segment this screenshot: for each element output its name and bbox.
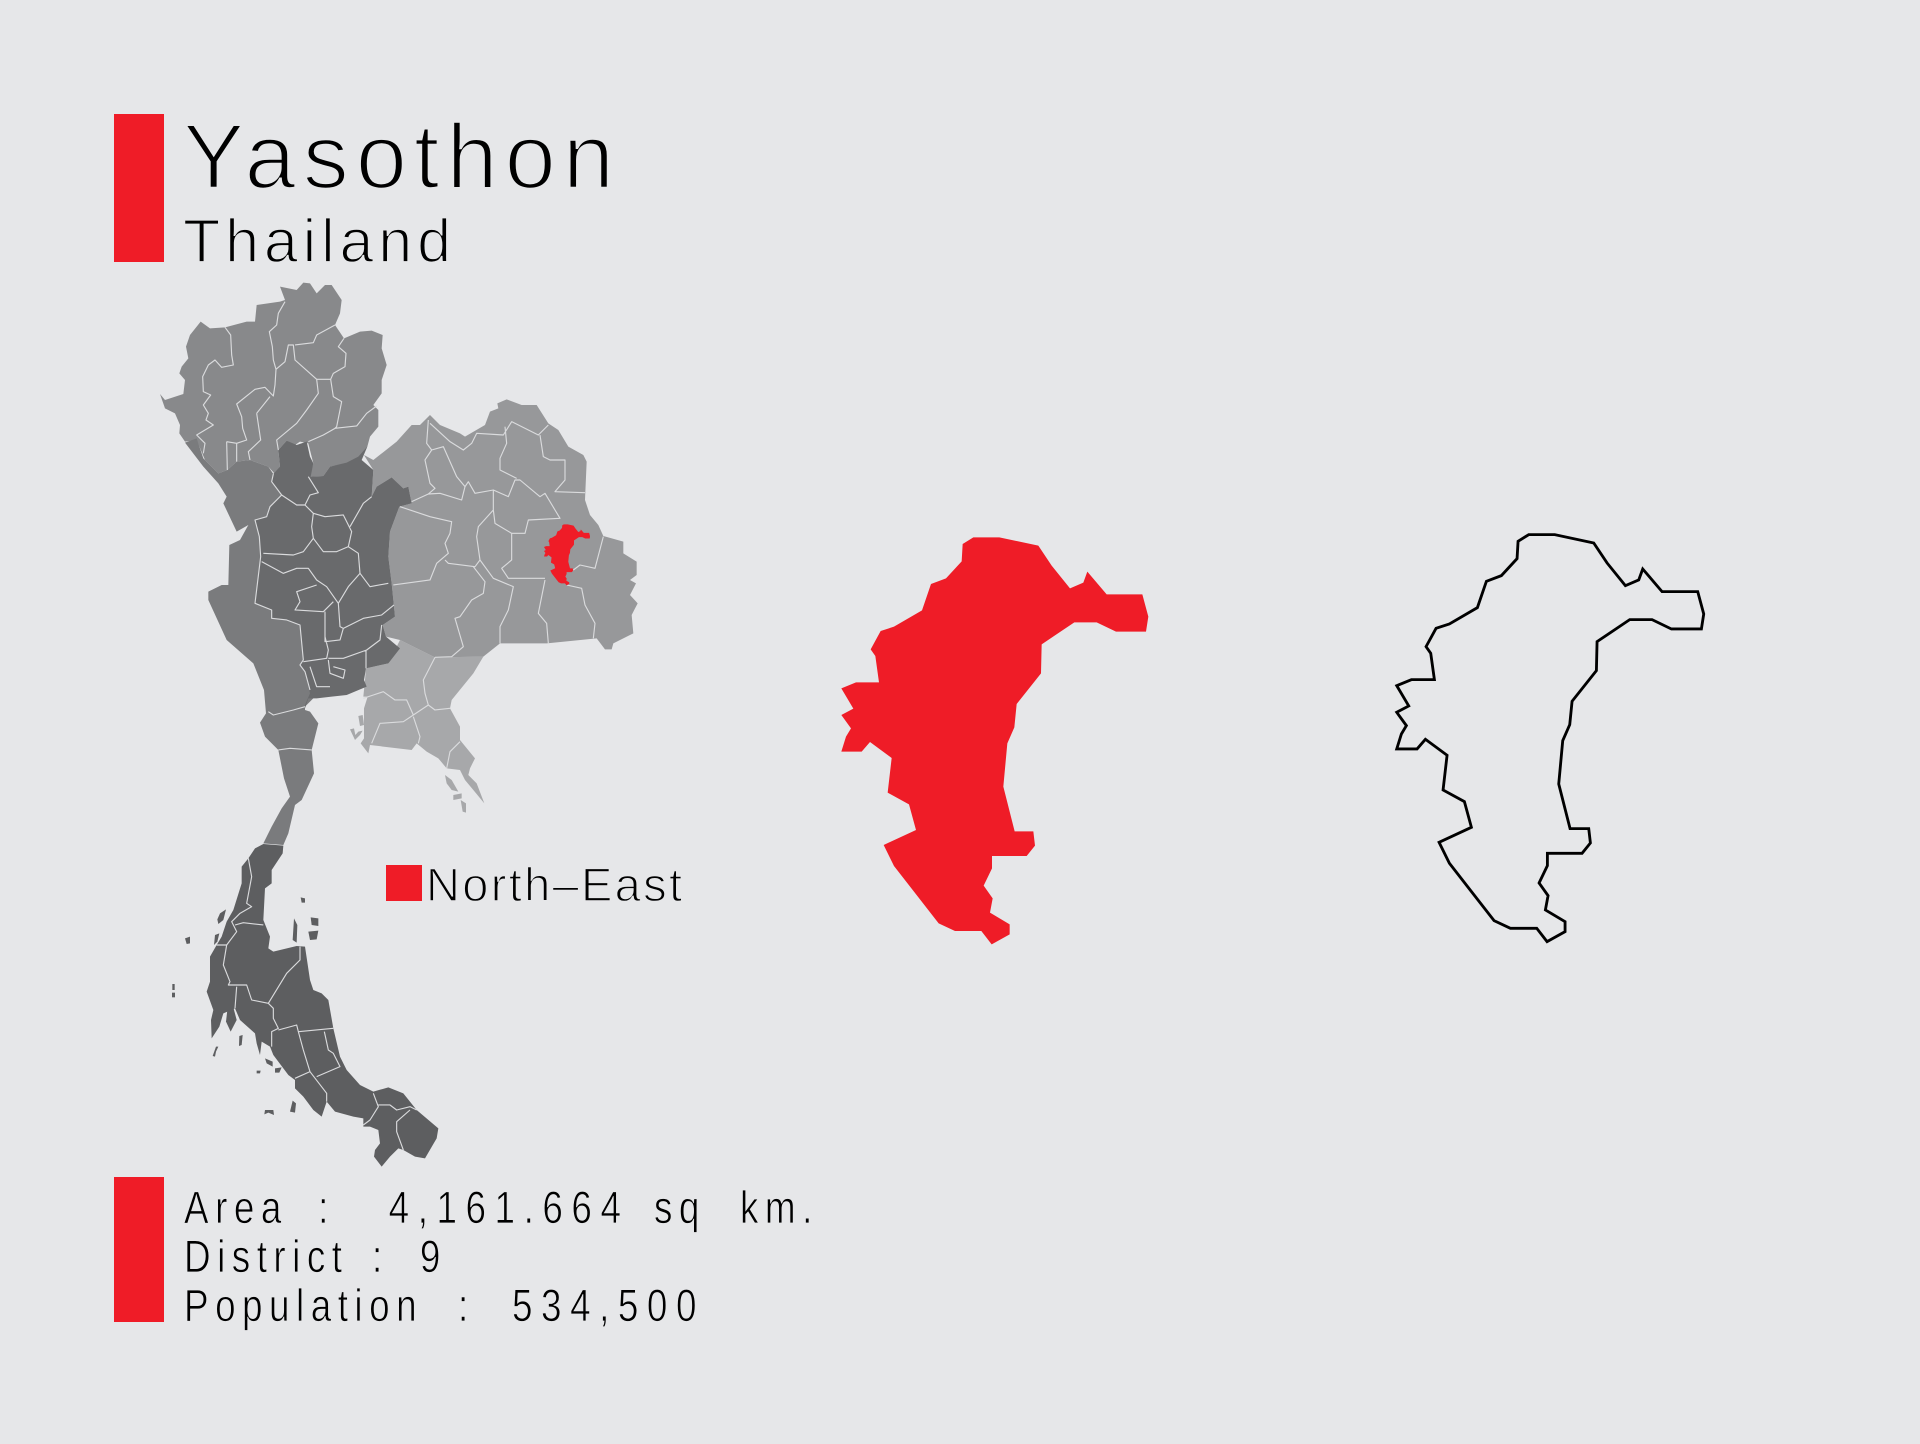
region borders: north, central, north-east (197, 302, 603, 768)
title: Yasothon: Yasothon (183, 106, 614, 208)
region: North-East (364, 399, 638, 657)
stat: area: Area (184, 1183, 288, 1233)
stat: area: sq (654, 1183, 706, 1233)
region: Central (255, 441, 412, 708)
region borders: south (217, 858, 417, 1150)
legend label: North–East (426, 858, 682, 911)
highlighted province: Yasothon on national map (544, 524, 590, 585)
subtitle: Thailand: Thailand (183, 207, 451, 275)
province outline: black (1397, 535, 1704, 942)
stat: population: Population (184, 1281, 423, 1331)
region: East (350, 640, 484, 813)
map of Thailand by region (160, 283, 638, 845)
stat: population: 534,500 (512, 1281, 705, 1331)
stat: district: District (184, 1232, 349, 1282)
region: West and lower north (185, 438, 318, 845)
stat: area: km. (740, 1183, 819, 1233)
stat: area: 4,161.664 (389, 1183, 629, 1233)
stat: district: 9 (420, 1232, 447, 1282)
region: South (172, 844, 438, 1167)
stat: area: : (318, 1183, 335, 1233)
legend swatch (386, 865, 422, 901)
legend: North-East (386, 858, 682, 911)
region: North (160, 283, 387, 477)
stats accent bar (114, 1177, 164, 1322)
title accent bar (114, 114, 164, 262)
stat: district: : (372, 1232, 389, 1282)
stats text block (184, 1183, 819, 1331)
stat: population: : (458, 1281, 475, 1331)
province silhouette: red (841, 537, 1148, 944)
